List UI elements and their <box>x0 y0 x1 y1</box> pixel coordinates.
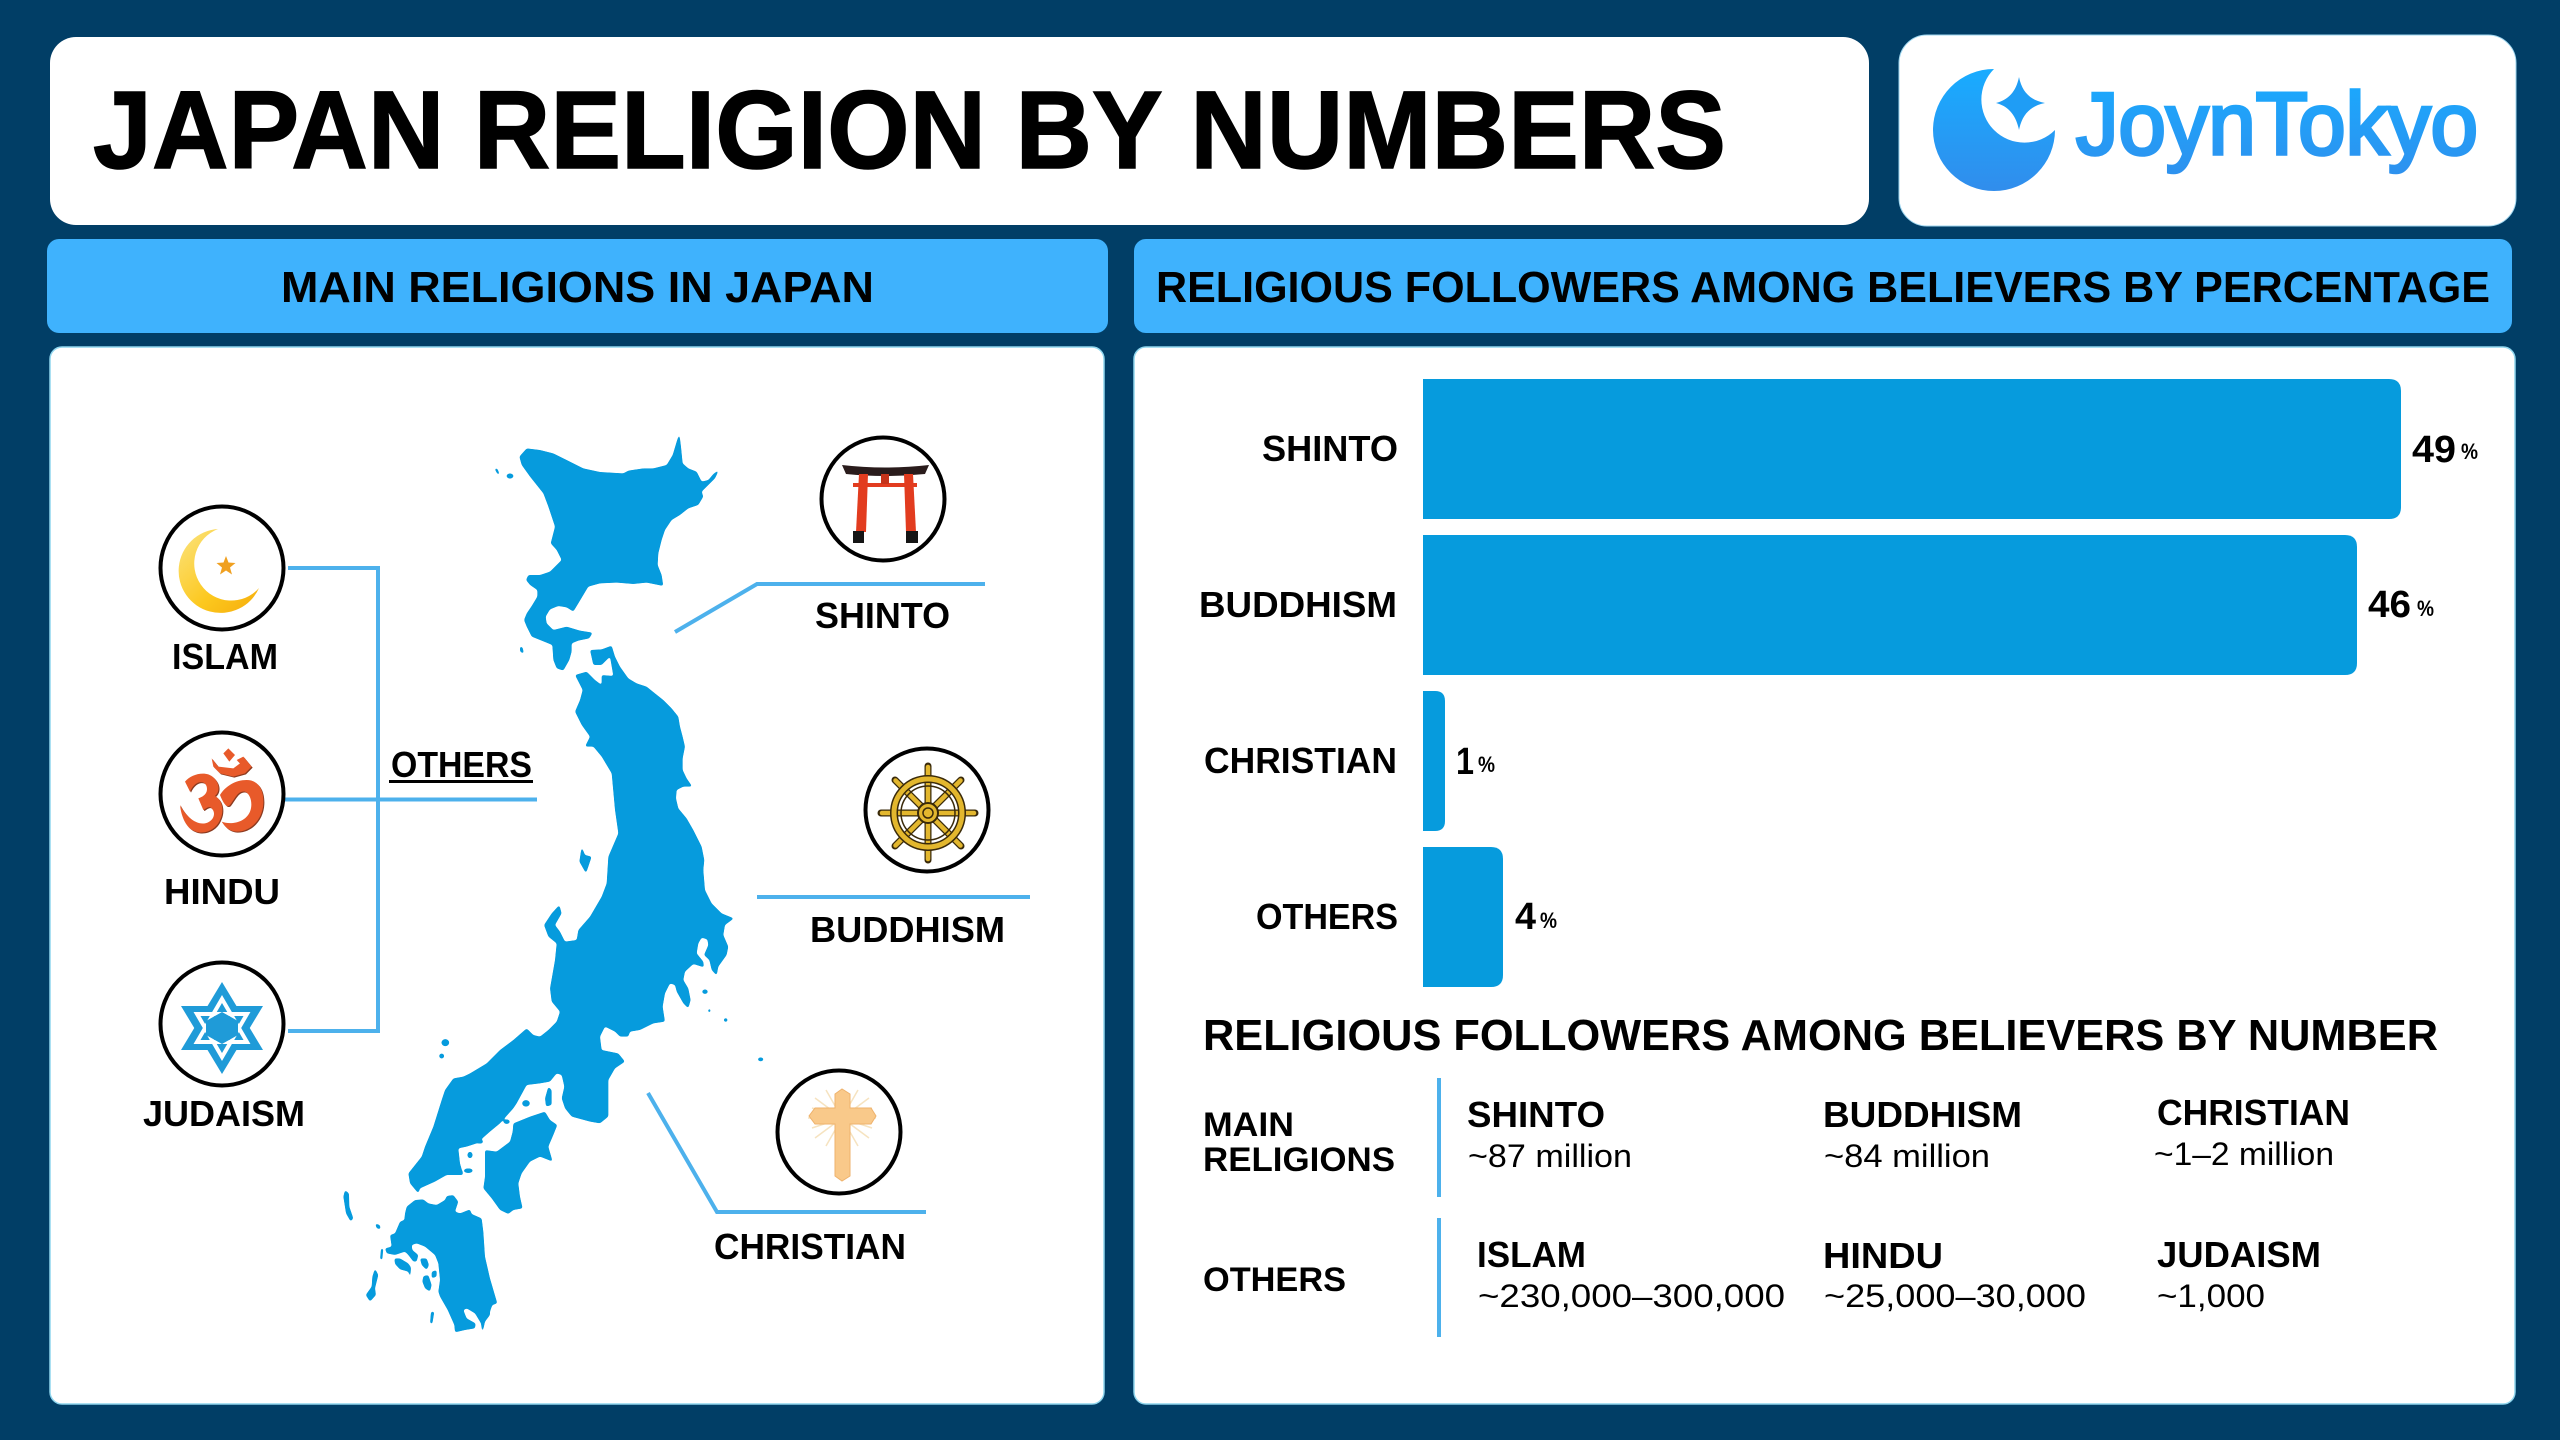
icon: hindu om <box>160 732 284 856</box>
icon: christian cross <box>778 1070 900 1194</box>
label: shinto: SHINTO <box>815 595 950 636</box>
panel: followers statistics <box>1134 347 2515 1404</box>
label: christian: CHRISTIAN <box>714 1226 906 1267</box>
callout lines <box>648 584 1030 1212</box>
table row: main religions: CHRISTIAN <box>2157 1092 2350 1133</box>
label: buddhism: BUDDHISM <box>810 909 1005 950</box>
shikoku <box>483 1112 557 1214</box>
table row: others: ~230,000–300,000 <box>1478 1278 1785 1314</box>
awaji and small islands <box>545 1087 552 1107</box>
bar chart: percentage of followers <box>1199 379 2478 987</box>
label: others with underline: OTHERS <box>391 744 532 785</box>
bar: others 4%: OTHERS <box>1256 896 1398 937</box>
heading: main religions <box>47 239 1108 333</box>
label: islam: ISLAM <box>172 636 278 677</box>
others bracket lines <box>285 568 537 1031</box>
table row: others: OTHERS <box>1203 1261 1346 1299</box>
bar: shinto 49% <box>1262 379 2478 519</box>
heading: main religions: MAIN RELIGIONS IN JAPAN <box>281 263 874 312</box>
bar: others 4%: 4 <box>1515 896 1536 938</box>
icon: crescent moon and star <box>1933 69 2055 191</box>
bar: buddhism 46% <box>1199 535 2434 675</box>
bar: others 4%: % <box>1540 908 1557 933</box>
sado <box>579 847 592 873</box>
bar: christian 1%: 1 <box>1456 741 1474 783</box>
table row: main religions: MAIN <box>1203 1106 1294 1144</box>
goto and tsushima <box>366 1268 378 1302</box>
bar: buddhism 46%: BUDDHISM <box>1199 584 1397 625</box>
table row: others: HINDU <box>1823 1235 1943 1276</box>
table row: main religions: ~87 million <box>1468 1138 1632 1174</box>
bar: shinto 49%: 49 <box>2412 429 2456 471</box>
bar: shinto 49%: % <box>2461 439 2478 464</box>
logo card <box>1899 35 2516 226</box>
bar: shinto 49%: SHINTO <box>1262 428 1398 469</box>
bar: christian 1%: % <box>1478 752 1495 777</box>
table row: others: ~25,000–30,000 <box>1824 1278 2086 1314</box>
bar: christian 1%: CHRISTIAN <box>1204 740 1397 781</box>
panel: main religions map <box>50 347 1104 1404</box>
map of Japan <box>343 433 764 1334</box>
bar: buddhism 46%: % <box>2417 596 2434 621</box>
honshu <box>408 646 734 1193</box>
table row: others: ISLAM <box>1477 1234 1586 1275</box>
heading: followers by percentage <box>1134 239 2512 333</box>
table row: main religions: BUDDHISM <box>1823 1094 2022 1135</box>
title card <box>50 37 1869 225</box>
bar: others 4% <box>1256 847 1557 987</box>
icon: islam crescent <box>160 506 284 630</box>
kyushu <box>385 1195 497 1334</box>
heading: followers by number: RELIGIOUS FOLLOWERS AMONG BELIEVERS BY NUMBER <box>1203 1011 2438 1060</box>
table row: others: JUDAISM <box>2157 1234 2321 1275</box>
icon: shinto torii <box>822 438 944 560</box>
table row: main religions: RELIGIONS <box>1203 1141 1395 1179</box>
icon: star of david <box>160 962 284 1086</box>
icon: dharma wheel <box>866 748 988 872</box>
table row: others <box>1203 1218 2321 1337</box>
bar: buddhism 46%: 46 <box>2368 584 2411 626</box>
label: judaism: JUDAISM <box>143 1093 305 1134</box>
table row: main religions: SHINTO <box>1467 1094 1605 1135</box>
table row: others: ~1,000 <box>2157 1278 2265 1314</box>
table row: main religions <box>1203 1078 2350 1197</box>
title: JAPAN RELIGION BY NUMBERS <box>93 69 1726 192</box>
bar: christian 1% <box>1204 691 1495 831</box>
label: hindu: HINDU <box>164 871 280 912</box>
heading: followers by percentage: RELIGIOUS FOLLOWERS AMONG BELIEVERS BY PERCENTAGE <box>1156 263 2490 312</box>
logo wordmark: JoynTokyo <box>2076 74 2478 173</box>
table row: main religions: ~1–2 million <box>2154 1136 2334 1172</box>
table row: main religions: ~84 million <box>1824 1138 1990 1174</box>
